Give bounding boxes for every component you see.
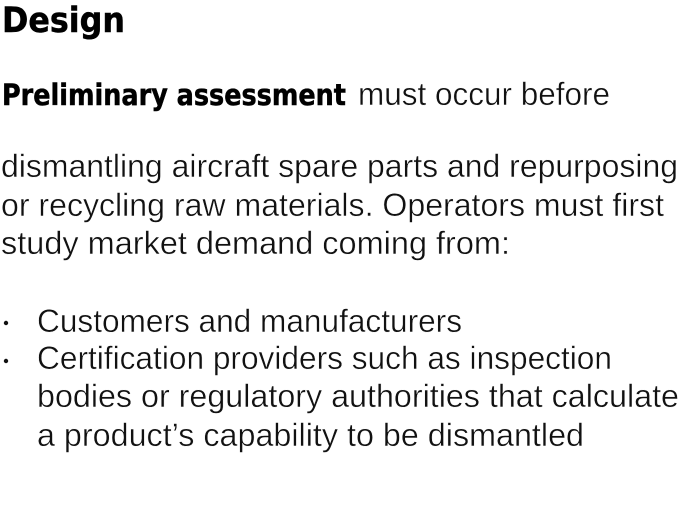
text block: preliminary assessment: Preliminary assessment: [2, 78, 346, 112]
bullet list: [4, 303, 679, 453]
bullet: certification providers: [4, 340, 679, 453]
text block: dismantling paragraph: study market demand coming from:: [1, 225, 510, 261]
text block: dismantling paragraph: dismantling aircraft spare parts and repurposing: [1, 148, 678, 184]
bullet: customers and manufacturers: Customers and manufacturers: [37, 303, 462, 339]
bullet: certification providers: bodies or regulatory authorities that calculate: [37, 378, 679, 414]
bullet: certification providers: Certification providers such as inspection: [37, 340, 612, 376]
heading: Design: Design: [2, 1, 125, 41]
text block: preliminary assessment: [2, 76, 610, 112]
text block: preliminary assessment: must occur before: [358, 76, 610, 112]
text block: dismantling paragraph: or recycling raw materials. Operators must first: [1, 187, 664, 223]
text block: dismantling paragraph: [1, 148, 678, 261]
bullet: certification providers: a product’s capability to be dismantled: [37, 417, 584, 453]
